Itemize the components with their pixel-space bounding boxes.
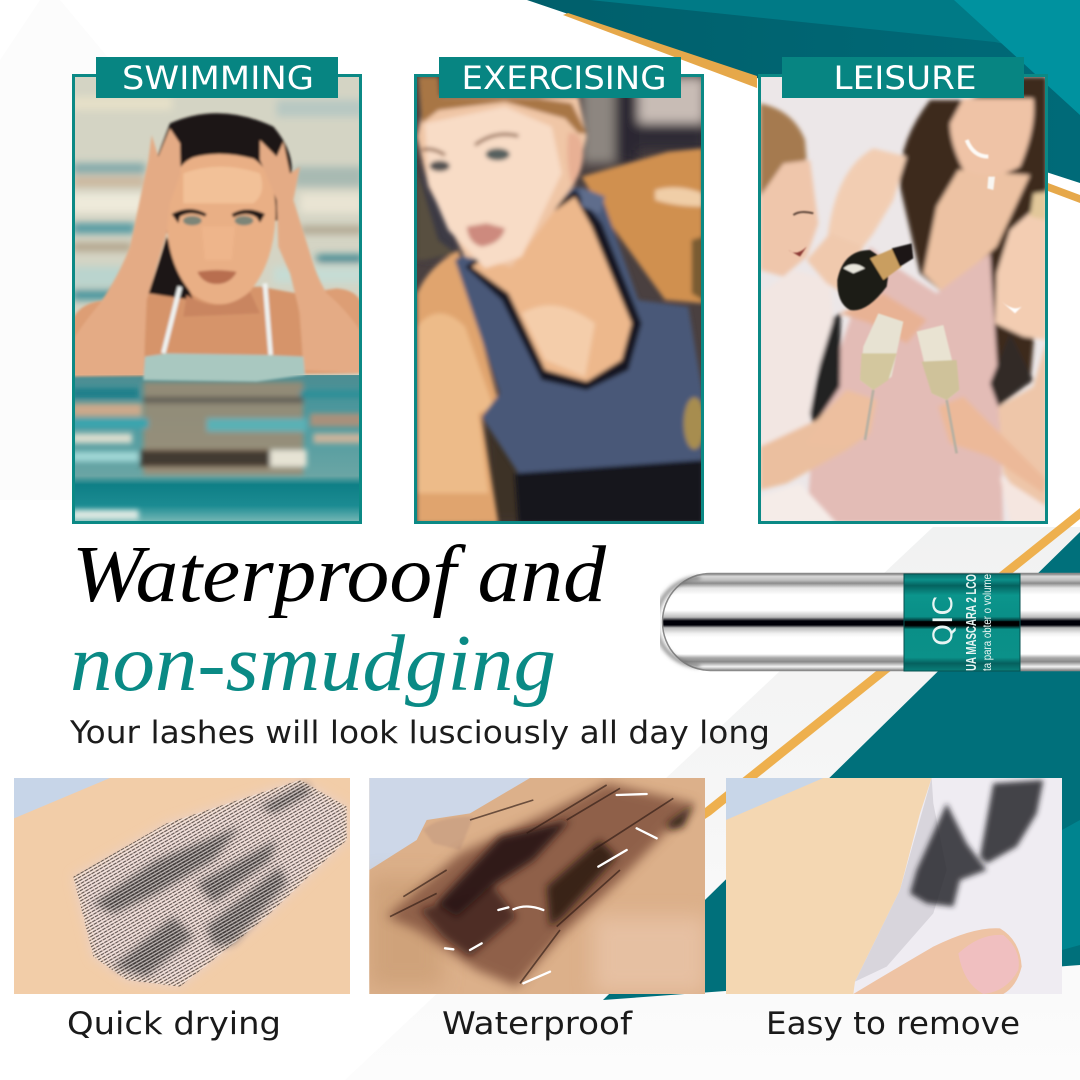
photo: woman exercising: [417, 75, 705, 523]
label: leisure: LEISURE: [834, 59, 976, 97]
label: swimming: [96, 57, 338, 98]
heading: waterproof and non-smudging: [70, 531, 607, 708]
panel: leisure: [760, 57, 1047, 523]
panel: easy to remove: [726, 778, 1062, 1042]
band text: QIC: [928, 596, 959, 646]
photo: wet swatch on skin: [369, 778, 707, 994]
photo: woman in pool: [72, 75, 363, 523]
panel: exercising: [416, 57, 705, 523]
photo: wiping swatch with cotton pad: [726, 778, 1062, 994]
heading line 2: non-smudging: [70, 620, 556, 708]
caption: quick drying: Quick drying: [67, 1006, 281, 1042]
caption: easy to remove: Easy to remove: [766, 1006, 1020, 1042]
label: swimming: SWIMMING: [122, 59, 314, 97]
label: exercising: EXERCISING: [462, 59, 666, 97]
panel: waterproof: [369, 778, 707, 1042]
band text: ta para obter o volume: [980, 574, 994, 671]
band text: UA MASCARA 2 LCO: [963, 574, 980, 671]
heading line 1: Waterproof and: [72, 531, 607, 619]
photo: friends with champagne: [760, 75, 1047, 523]
caption: waterproof: Waterproof: [442, 1006, 633, 1042]
photo frame: [760, 76, 1046, 522]
band text: [928, 574, 994, 671]
panel: quick drying: [14, 778, 350, 1042]
photo frame: [416, 76, 702, 522]
label: leisure: [782, 57, 1024, 98]
photo: mascara swatch on skin: [14, 778, 350, 994]
product: mascara tube: [656, 574, 1080, 671]
panel: swimming: [72, 57, 363, 523]
photo frame: [74, 76, 360, 522]
subtitle: Your lashes will look lusciously all day long: [69, 715, 770, 751]
